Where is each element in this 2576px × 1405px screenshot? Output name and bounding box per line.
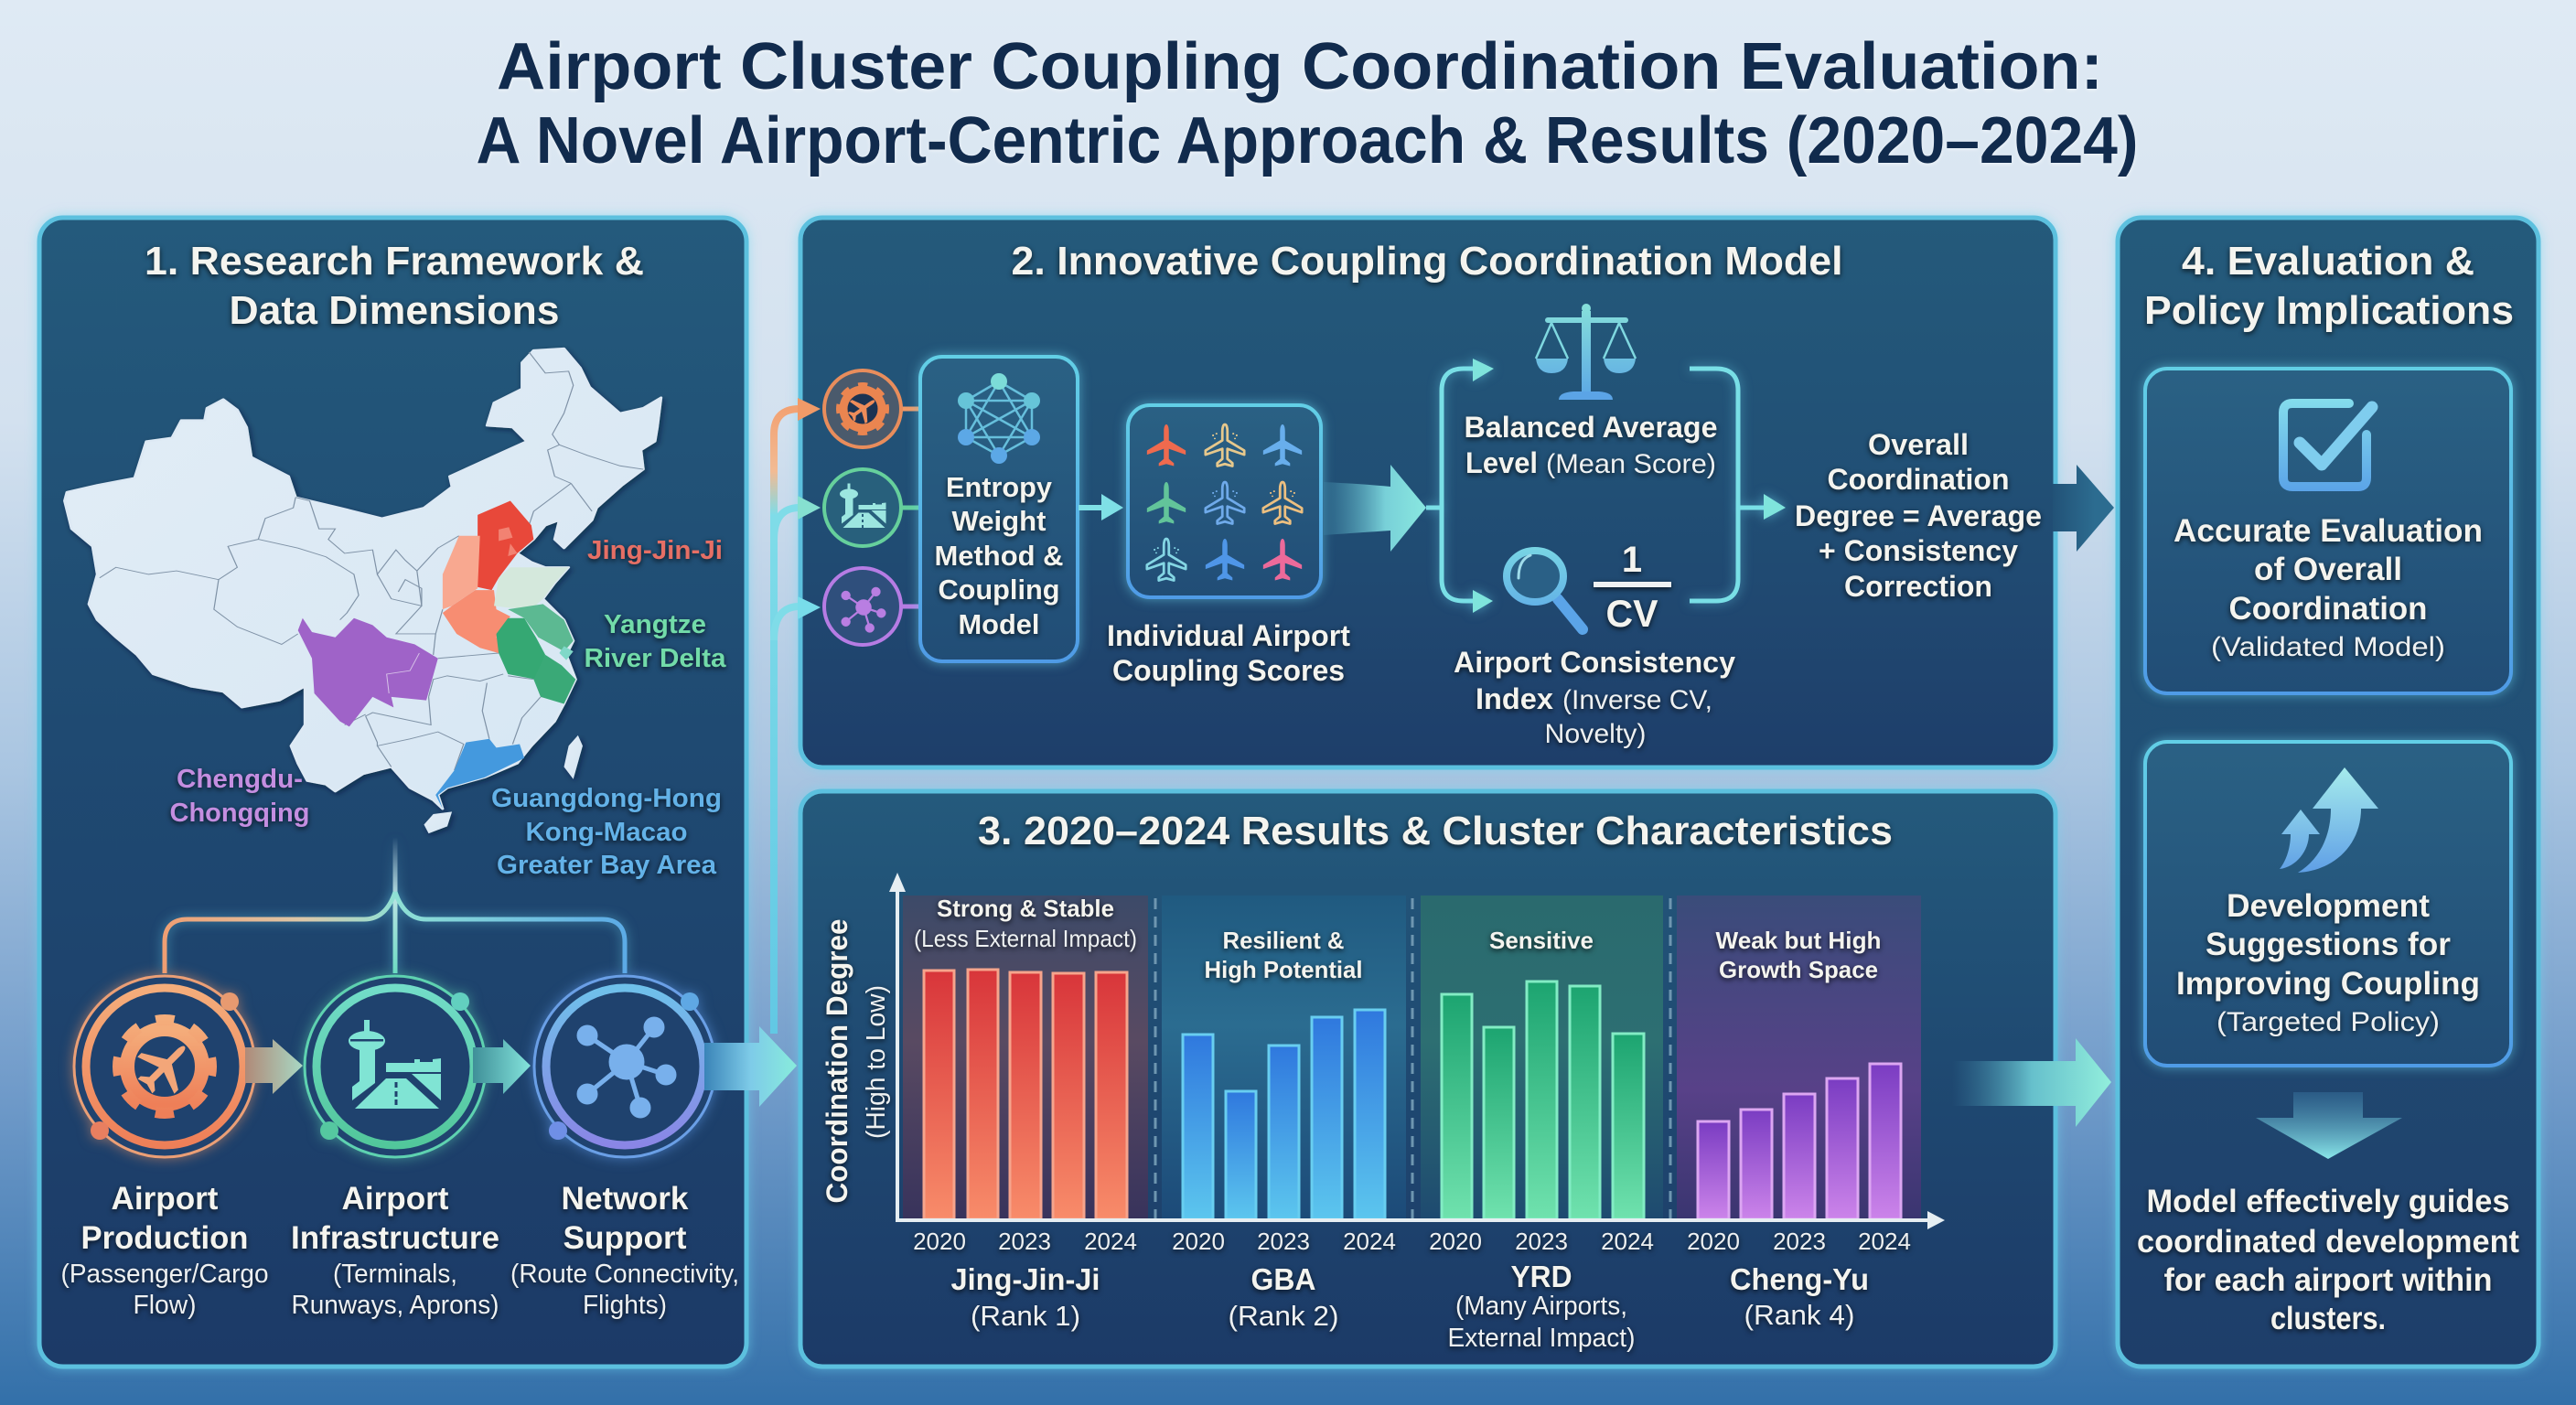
text: development suggestions: (Targeted Policy) [2216,1007,2440,1037]
cluster name: Jing-Jin-Ji rank 1: Jing-Jin-Ji [951,1262,1100,1296]
text: entropy weight method and coupling model: Weight [951,505,1046,537]
text: entropy weight method and coupling model: Entropy [946,471,1053,503]
icon: checkbox [2283,403,2372,487]
label: airport infrastructure: (Terminals, [333,1260,457,1289]
map label: Greater Bay Area [491,784,722,880]
x-axis year labels: 2023 [998,1228,1051,1255]
arrow: panel 1 to panel 3 [704,1026,797,1107]
arrow: down to conclusion [2256,1092,2402,1159]
map label: Yangtze River Delta: River Delta [584,644,726,673]
panel: innovative coupling coordination model [800,218,2055,767]
map label: Jing-Jin-Ji: Jing-Jin-Ji [587,536,723,565]
x-axis year labels: 2023 [1773,1228,1826,1255]
label: airport production: Flow) [134,1291,196,1320]
cluster band: GBA [1162,896,1406,1219]
icon: network support nodes [534,976,715,1157]
title: Airport Cluster Coupling Coordination Evaluation: [497,30,2103,103]
cluster name: Cheng-Yu rank 4 [1730,1262,1869,1331]
text: conclusion: for each airport within [2164,1262,2492,1298]
label: airport production: Production [80,1220,249,1256]
map label: Chengdu-Chongqing [170,765,309,828]
bracket: split into average and consistency [1426,359,1494,613]
label: airport production: (Passenger/Cargo [60,1260,269,1289]
heading: panel 1 [145,239,644,333]
label: airport infrastructure: Airport [342,1181,449,1217]
x-axis year labels: 2024 [1343,1228,1396,1255]
cluster band: Cheng-Yu: Growth Space [1719,956,1878,983]
box: individual airport score grid [1128,405,1321,597]
cluster band: Jing-Jin-Ji: (Less External Impact) [914,925,1137,952]
cluster name: GBA rank 2: (Rank 2) [1228,1300,1339,1332]
text: airport consistency index [1454,646,1735,749]
axes [889,873,1945,1229]
cluster name: Cheng-Yu rank 4: (Rank 4) [1744,1299,1855,1331]
text: balanced average level: (Mean Score) [1546,449,1716,479]
bracket: merge to overall coordination [1690,369,1786,601]
arrow: panel 2 to panel 4 [2053,465,2114,552]
cluster name: YRD: External Impact) [1447,1324,1636,1353]
icon: airport infrastructure tower and runway [305,976,486,1157]
cluster name: YRD: YRD [1511,1260,1572,1293]
text: entropy weight method and coupling model [935,471,1063,640]
box: entropy weight method [920,357,1078,661]
label: network support: Network [562,1181,689,1217]
cluster name: YRD: (Many Airports, [1455,1292,1627,1321]
icon: balance scales [1536,304,1636,400]
x-axis year labels: 2023 [1515,1228,1568,1255]
connector: panel 1 to model inputs [774,398,821,1034]
icon: airport production gear [74,976,255,1157]
arrow: scores to split [1324,465,1426,552]
text: airport consistency index: (Inverse CV, [1562,685,1712,715]
text: individual airport coupling scores: Individual Airport [1107,619,1350,652]
text: airport consistency index: Index [1476,682,1553,715]
text: overall coordination degree: + Consistency [1819,534,2018,567]
icon: small gear input [824,370,920,447]
formula: one over CV: CV [1606,592,1658,635]
text: overall coordination degree: Coordination [1828,463,2009,496]
arrow: panel 3 to panel 4 [1952,1038,2111,1127]
panel: research framework and data dimensions [39,218,746,1367]
x-axis year labels [913,1228,1911,1255]
card: accurate evaluation [2145,369,2511,693]
text: overall coordination degree: Correction [1844,570,1992,603]
text: airport consistency index: Novelty) [1544,719,1647,749]
label: airport infrastructure [291,1181,499,1320]
bar chart: coordination degree by cluster [821,873,1945,1255]
text: balanced average level: Level [1465,446,1538,479]
map label: Chengdu-Chongqing: Chongqing [170,799,309,828]
text: accurate evaluation: Coordination [2228,591,2428,627]
text: conclusion: clusters. [2270,1301,2386,1336]
x-axis year labels: 2020 [1687,1228,1740,1255]
icon: magnifying glass [1507,551,1583,629]
label: airport infrastructure: Infrastructure [291,1220,499,1256]
cluster band: YRD: Sensitive [1489,927,1594,954]
panel: 2020-2024 results and cluster characteristics [800,791,2055,1367]
cluster name: GBA rank 2: GBA [1251,1262,1315,1296]
map label: Greater Bay Area: Guangdong-Hong [491,784,722,813]
text: conclusion [2137,1184,2519,1336]
x-axis year labels: 2020 [1172,1228,1225,1255]
cluster name: Jing-Jin-Ji rank 1: (Rank 1) [971,1300,1080,1332]
cluster band: Jing-Jin-Ji: Strong & Stable [937,895,1114,922]
text: conclusion: Model effectively guides [2146,1184,2510,1219]
map label: Yangtze River Delta [584,610,726,673]
cluster band: Cheng-Yu: Weak but High [1716,927,1881,954]
x-axis year labels: 2024 [1601,1228,1654,1255]
heading: panel 4: Policy Implications [2144,288,2514,333]
label: airport production: Airport [112,1181,219,1217]
icon: small network input [824,568,920,645]
x-axis year labels: 2020 [1429,1228,1482,1255]
cluster name: GBA rank 2 [1228,1262,1339,1332]
text: entropy weight method and coupling model: Method & [935,540,1063,572]
text: entropy weight method and coupling model: Model [959,608,1039,640]
formula: one over CV: 1 [1622,540,1642,580]
y-axis title: (High to Low) [862,985,891,1139]
formula: one over CV [1594,540,1671,635]
text: development suggestions: Suggestions for [2206,927,2451,962]
x-axis year labels: 2020 [913,1228,966,1255]
cluster band: Cheng-Yu [1677,896,1921,1219]
text: accurate evaluation [2174,513,2483,662]
cluster name: YRD [1447,1260,1636,1353]
cluster name: Jing-Jin-Ji rank 1 [951,1262,1100,1332]
text: accurate evaluation: of Overall [2254,552,2402,587]
heading: panel 2: 2. Innovative Coupling Coordination Model [1012,239,1842,284]
icon: rising arrows [2280,767,2378,873]
label: airport infrastructure: Runways, Aprons) [291,1291,499,1320]
tree connector [165,837,625,973]
heading: panel 3: 3. 2020–2024 Results & Cluster Characteristics [978,809,1893,853]
map label: Chengdu-Chongqing: Chengdu- [177,765,303,794]
text: entropy weight method and coupling model: Coupling [939,574,1059,606]
map of China with highlighted clusters [65,349,661,833]
text: overall coordination degree [1795,428,2042,603]
text: overall coordination degree: Degree = Average [1795,499,2042,532]
text: individual airport coupling scores: Coupling Scores [1112,654,1345,687]
text: airport consistency index: Airport Consistency [1454,646,1735,679]
heading: panel 1: 1. Research Framework & [145,239,644,284]
arrow: model to scores [1079,494,1123,520]
label: network support: Flights) [583,1291,667,1320]
label: network support: (Route Connectivity, [510,1260,739,1289]
text: balanced average level: Balanced Average [1464,411,1718,444]
map label: Greater Bay Area: Kong-Macao [525,818,688,847]
label: airport production [60,1181,269,1320]
cluster band: GBA: High Potential [1204,956,1363,983]
cluster name: Cheng-Yu rank 4: Cheng-Yu [1730,1262,1869,1296]
text: development suggestions: Development [2227,888,2430,924]
text: accurate evaluation: (Validated Model) [2211,632,2445,662]
y-axis title [821,918,891,1204]
heading: panel 4: 4. Evaluation & [2182,239,2474,284]
label: network support: Support [564,1220,687,1256]
arrow: production to infrastructure [245,1039,303,1094]
icon: small tower input [824,469,920,546]
heading: panel 4 [2144,239,2514,333]
text: accurate evaluation: Accurate Evaluation [2174,513,2483,549]
title [476,30,2139,177]
map label: Yangtze River Delta: Yangtze [604,610,706,639]
card: development suggestions [2145,742,2511,1066]
cluster band: YRD [1421,896,1663,1219]
icon: neural network [958,373,1040,464]
text: conclusion: coordinated development [2137,1224,2519,1260]
cluster band: GBA: Resilient & [1222,927,1345,954]
text: overall coordination degree: Overall [1868,428,1969,461]
map label: Greater Bay Area: Greater Bay Area [497,851,717,880]
text: individual airport coupling scores [1107,619,1350,687]
x-axis year labels: 2023 [1257,1228,1310,1255]
text: development suggestions: Improving Coupling [2176,966,2480,1002]
arrow: infrastructure to network [473,1039,531,1094]
cluster band: Jing-Jin-Ji [903,895,1148,1219]
label: network support [510,1181,739,1320]
x-axis year labels: 2024 [1858,1228,1911,1255]
y-axis title: Coordination Degree [821,918,853,1204]
text: balanced average level [1464,411,1718,479]
title: A Novel Airport-Centric Approach & Results (2020–2024) [476,104,2139,177]
panel: evaluation and policy implications [2118,218,2538,1367]
text: development suggestions [2176,888,2480,1037]
heading: panel 1: Data Dimensions [229,288,560,333]
x-axis year labels: 2024 [1084,1228,1137,1255]
